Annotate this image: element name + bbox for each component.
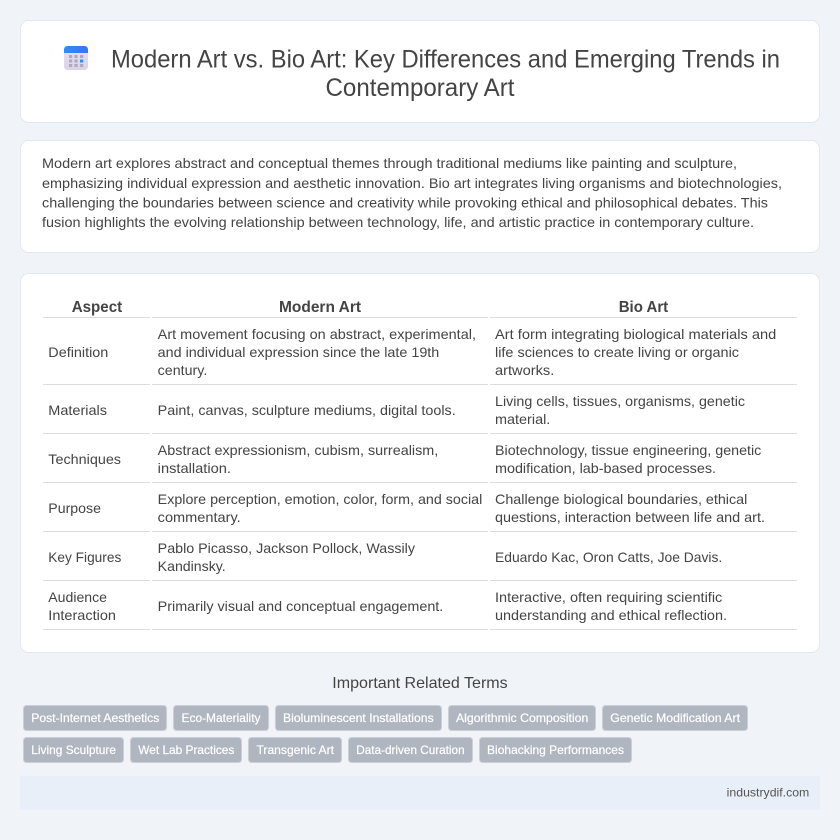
text block: introduction paragraph [42,155,782,230]
table row: audience interaction: Interactive, often requiring scientific [495,589,722,605]
table row: purpose: questions, interaction between life and art. [495,509,765,525]
title: Contemporary Art [326,74,515,102]
table row: definition: artworks. [495,362,554,378]
table row: techniques: Biotechnology, tissue engineering, genetic [495,442,761,458]
table row: definition [48,326,776,378]
table row: purpose: Challenge biological boundaries, ethical [495,491,747,507]
tag: Post-Internet Aesthetics [24,706,166,730]
table row: materials: Living cells, tissues, organisms, genetic [495,393,745,409]
title: Modern Art vs. Bio Art: Key Differences and Emerging Trends in [111,46,780,74]
tag: Genetic Modification Art: Genetic Modification Art [610,711,741,725]
tag: Eco-Materiality: Eco-Materiality [182,711,260,725]
panel: introduction [20,140,820,252]
table row: purpose: Purpose [48,500,101,516]
table row: techniques: modification, lab-based processes. [495,460,716,476]
text block: introduction paragraph: Modern art explores abstract and conceptual themes through traditional mediums like painting and sculpture, [42,155,737,171]
footer [20,776,820,810]
tag: Eco-Materiality [174,706,268,730]
table row: audience interaction: Primarily visual and conceptual engagement. [158,598,443,614]
table row: purpose: Explore perception, emotion, color, form, and social [158,491,482,507]
title [111,46,780,102]
tag: Living Sculpture: Living Sculpture [31,743,116,757]
table row: key figures: Key Figures [48,549,121,565]
table row: definition: Definition [48,344,108,360]
table row: audience interaction [48,589,727,623]
table row: audience interaction: Audience [48,589,107,605]
table row: definition: life sciences to create living or organic [495,344,739,360]
table row: audience interaction: understanding and ethical reflection. [495,607,727,623]
table header: Modern Art [279,299,362,316]
tag: Wet Lab Practices [130,738,242,762]
tag: Post-Internet Aesthetics: Post-Internet Aesthetics [31,711,159,725]
table row: techniques: Abstract expressionism, cubism, surrealism, [158,442,438,458]
table row: definition: Art movement focusing on abstract, experimental, [158,326,476,342]
tag: Genetic Modification Art [602,706,748,730]
tag: Biohacking Performances: Biohacking Performances [487,743,624,757]
table header: Bio Art [619,299,669,316]
text block: introduction paragraph: emphasizing individual expression and aesthetic innovation. Bio art integrates living organisms and biotechnologies, [42,175,782,191]
tag: Algorithmic Composition: Algorithmic Composition [456,711,588,725]
table row: materials: Paint, canvas, sculpture mediums, digital tools. [158,402,456,418]
related term tags [24,706,748,762]
tag: Living Sculpture [24,738,124,762]
table row: purpose [48,491,765,525]
tag: Data-driven Curation [348,738,472,762]
table row: materials [48,393,745,427]
table row: key figures: Kandinsky. [158,558,226,574]
table row: techniques [48,442,761,476]
tag: Biohacking Performances [480,738,632,762]
table row: techniques: Techniques [48,451,121,467]
heading: related terms: Important Related Terms [332,675,508,692]
tag: Data-driven Curation: Data-driven Curation [356,743,465,757]
table row: materials: Materials [48,402,107,418]
tag: Bioluminescent Installations: Bioluminescent Installations [283,711,434,725]
table row: audience interaction: Interaction [48,607,116,623]
table row: purpose: commentary. [158,509,241,525]
tag: Algorithmic Composition [448,706,596,730]
table row: key figures: Eduardo Kac, Oron Catts, Joe Davis. [495,549,722,565]
table row: techniques: installation. [158,460,231,476]
tag: Wet Lab Practices: Wet Lab Practices [138,743,234,757]
panel: header [20,20,820,122]
icon: calendar [64,46,88,70]
tag: Transgenic Art: Transgenic Art [256,743,335,757]
text block: introduction paragraph: challenging the boundaries between science and creativity while provoking ethical and philosophical debates. This [42,194,768,210]
table header [72,299,669,316]
table row: key figures [48,540,722,574]
table row: key figures: Pablo Picasso, Jackson Pollock, Wassily [158,540,415,556]
tag: Transgenic Art [248,738,342,762]
table row: definition: Art form integrating biological materials and [495,326,776,342]
footer: industrydif.com [727,786,809,800]
table row: materials: material. [495,411,550,427]
tag: Bioluminescent Installations [276,706,442,730]
text block: introduction paragraph: fusion highlights the evolving relationship between technology, life, and artistic practice in contemporary culture. [42,214,754,230]
table row: definition: century. [158,362,207,378]
table header: Aspect [72,299,123,316]
panel: comparison table [20,274,820,652]
table row: definition: and individual expression since the late 19th [158,344,439,360]
